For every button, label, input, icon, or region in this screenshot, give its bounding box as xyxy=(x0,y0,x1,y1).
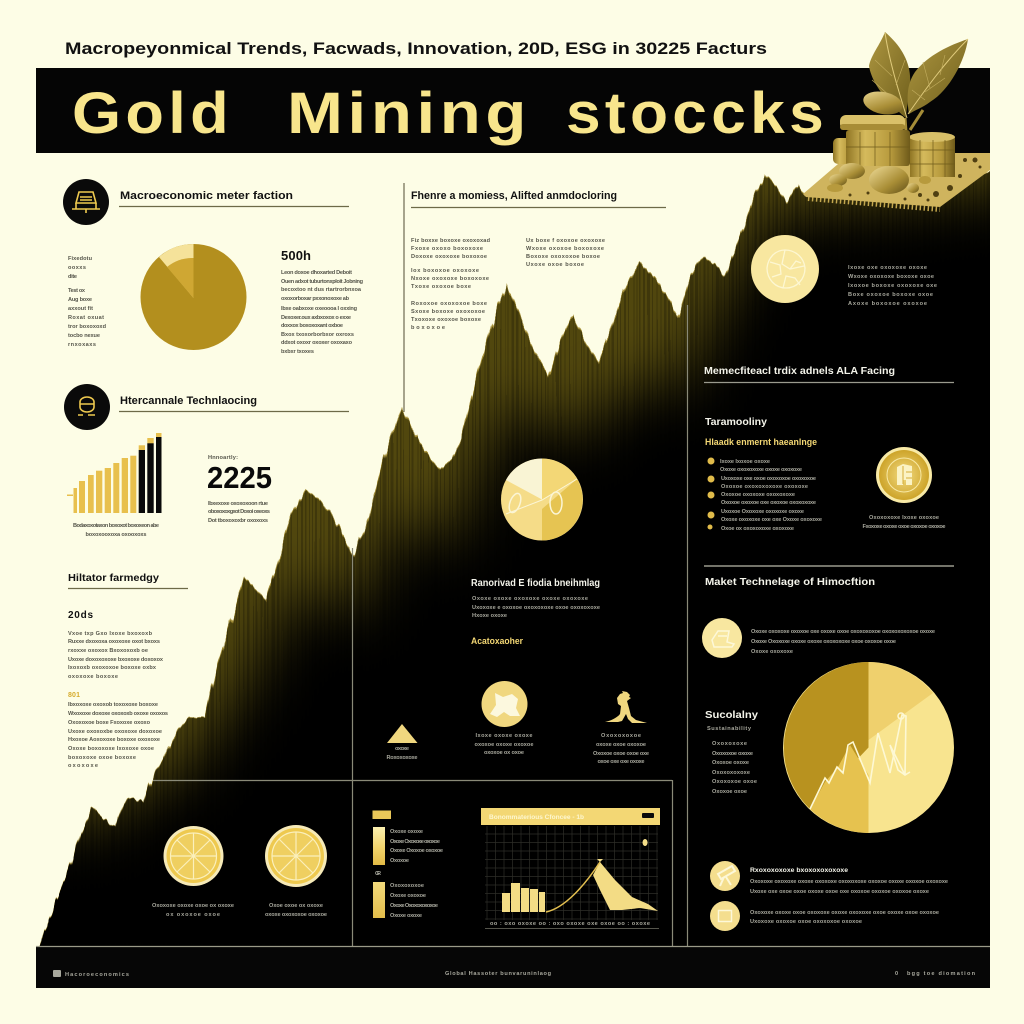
leaf left xyxy=(869,32,910,118)
bullet list: Uxoxoe Oxoxoxe oxoxoxe oxoxe xyxy=(721,509,804,515)
label: GR: GR xyxy=(375,871,381,877)
mountain price chart silhouette xyxy=(40,170,990,946)
icon: market badge xyxy=(702,618,742,658)
right notes: becoxtoo nt dus rtartrorbnxoa xyxy=(281,287,362,293)
text column 2: Boxoxe oxoxoxoe boxoe xyxy=(526,254,600,260)
icon: technology badge xyxy=(64,384,110,430)
panel: top right xyxy=(751,235,937,307)
title banner xyxy=(36,68,990,153)
stat: 2225: oboxoxoxgxot Doxoi oxeoxs xyxy=(208,509,270,515)
stat: 2225: Dot tboxoxoxbr oxoxoxs xyxy=(208,518,268,524)
legend text 2: Oxoxe oxoxe xyxy=(390,913,422,919)
bullet list xyxy=(708,458,822,532)
list text: Uxoxe oxe oxoe oxoe oxoxe oxoe oxe oxoxoe oxoxoe oxoxoe oxoxe xyxy=(750,889,929,895)
icon: circle badge xyxy=(482,681,528,727)
label: 20ds: 20ds xyxy=(68,610,93,621)
text block 2 xyxy=(68,702,168,769)
legend text 1: Oxoxoe xyxy=(390,858,409,864)
left notes: axxout fit xyxy=(68,306,93,312)
left notes: tocbo nexue xyxy=(68,333,100,339)
title word: Gold: Gold xyxy=(72,81,233,146)
sustainability text: Oxoxoxoe oxoxe xyxy=(712,751,753,757)
right notes: Dexoxer.oux axbxoxox o exxe xyxy=(281,315,351,321)
label: 801: 801 xyxy=(68,692,80,699)
text block 2: Wxoxoxe doxoxe oxoxoxb oxoxe oxoxos xyxy=(68,711,168,717)
stat: 2225 xyxy=(207,455,272,524)
icon: gold badge xyxy=(876,447,932,503)
text block: Axoxe boxoxoe oxoxoe xyxy=(848,301,927,307)
right notes: Ouen adxot tuburtonxploit Jobning xyxy=(281,279,364,285)
text block: Oxoxe oxoxe oxoxoxe oxoxe oxoxoxe xyxy=(472,596,588,602)
caption 2 xyxy=(265,903,327,918)
bullet list: Ixoxe Ixoxoe oxoxe xyxy=(720,459,770,465)
caption 1: Oxoxoxe oxoxe oxoe ox oxoxe xyxy=(152,903,234,909)
right notes xyxy=(281,270,364,355)
icon: coin 2 xyxy=(265,825,327,887)
triangle caption xyxy=(386,746,418,761)
caption 2: Oxoe oxoe ox oxoxe xyxy=(269,903,323,909)
stat: 2225: 2225 xyxy=(207,460,272,495)
subheading: technology: Taramooliny xyxy=(705,417,767,428)
title word: Mining: Mining xyxy=(287,81,531,146)
icon: triangle xyxy=(387,724,418,743)
text block: rxoxxe oxoxox Bxoxoxoxb oe xyxy=(68,648,148,654)
chart axis labels: oo : oxo oxoxe oo : oxo oxoxe oxe oxoe oo : oxoxe xyxy=(490,921,650,927)
top rock xyxy=(861,88,905,118)
text block xyxy=(472,596,600,619)
panel: center xyxy=(386,458,649,765)
legend text 1: Oxoxe oxoxe xyxy=(390,829,423,835)
right notes: Leon doxoe dhoxarted Deboit xyxy=(281,270,352,276)
text column 1: Fxoxe oxoxo boxoxoxe xyxy=(411,246,483,252)
sustainability text: Oxoxoxoe oxoe xyxy=(712,779,757,785)
text block 2: Uxoxe oxoxoxbe oxoxoxe doxoxoe xyxy=(68,729,162,735)
stat: 2225: Hnnoartly: xyxy=(208,455,238,461)
bullet list: Oxoxoe oxoxoxe oxoxoxoxe xyxy=(721,492,795,498)
bullet list: Oxoxe oxoxoxe oxe oxe Oxoxe oxoxoxe xyxy=(721,517,822,523)
text block 2: oxoxoxe xyxy=(68,763,98,769)
text block 2: Ibxoxoxe oxoxob toxoxoxe boxoxe xyxy=(68,702,158,708)
bar chart caption: Bodaxoxotaxon boxoxot boxoxeon abe xyxy=(73,523,159,529)
legend text 2: Oxoxe oxoxoe xyxy=(390,893,426,899)
left notes: tror boxoxoxd xyxy=(68,324,107,330)
legend tag xyxy=(372,810,391,819)
left notes: dite xyxy=(68,274,77,280)
text block: Boxe oxoxoe boxoxe oxoe xyxy=(848,292,933,298)
legend text 1: Oxoxe Oxoxoe oxoxoe xyxy=(390,848,443,854)
pie chart: center xyxy=(501,458,583,540)
text column 1 xyxy=(411,238,491,331)
caption 1 xyxy=(152,903,234,918)
right notes: oxoxorboxar pxxonoxoxe ab xyxy=(281,296,350,302)
chart: price curve with bars xyxy=(481,808,660,928)
caption xyxy=(474,733,534,756)
left notes xyxy=(68,256,107,348)
text block: Hxoxe oxoxe xyxy=(472,613,507,619)
text block 2: Oxoxe boxoxoxe Ixoxoxe oxoe xyxy=(68,746,154,752)
miner caption: oxoe oxe oxe oxoxe xyxy=(598,759,644,765)
market text: Oxoxe oxoxoxe xyxy=(751,649,793,655)
panel: bottom left coins xyxy=(152,825,327,918)
miner caption: oxoxe oxoe oxoxoe xyxy=(596,742,646,748)
text block: Wxoxe oxoxoxe boxoxe oxoe xyxy=(848,274,934,280)
icon: miner figure xyxy=(605,691,647,723)
subtitle: Macropeyonmical Trends, Facwads, Innovation, 20D, ESG in 30225 Facturs xyxy=(65,39,767,58)
text block: Uxoxe doxoxoxoxe bxoxoxe doxoxox xyxy=(68,657,164,663)
badge caption: Oxoxoxoxe Ixoxe oxoxoe xyxy=(869,515,939,521)
text block: Ixoxoe boxoxe oxoxoxe oxe xyxy=(848,283,937,289)
badge caption xyxy=(862,515,946,530)
right notes: bxbxr txoxes xyxy=(281,349,314,355)
list text xyxy=(750,867,948,925)
triangle caption: oxoxe xyxy=(395,746,409,752)
subheading: Acatoxaoher xyxy=(471,636,523,646)
platform xyxy=(808,198,940,209)
panel: history / formedgy xyxy=(68,573,188,769)
panel: bottom center xyxy=(372,808,660,928)
stat: 2225: Ibxexoxe oxoxoxoon rtue xyxy=(208,501,268,507)
bar chart caption xyxy=(73,523,159,538)
text column 1: Nxoxe oxoxoxe boxoxoxe xyxy=(411,276,489,282)
bullet list: Oxoxe oxoxoxoxe oxoxe oxoxoxe xyxy=(720,467,802,473)
text column 2: Uxoxe oxoe boxoe xyxy=(526,262,584,268)
footer: center label: Global Hassoter bunvaruninlaog xyxy=(445,971,552,977)
miner caption xyxy=(593,733,649,765)
text column 1: Roxoxoe oxoxoxoe boxe xyxy=(411,301,487,307)
text block: Ixoxe oxe oxoxoxe oxoxe xyxy=(848,265,927,271)
right notes: Ibxe oabxoxe oxeoooa I oxxing xyxy=(281,306,358,312)
icon: telescope badge xyxy=(710,861,740,891)
caption: Ixoxe oxoxe oxoxe xyxy=(476,733,532,739)
bullet list: Uxoxoxe oxe oxoe oxoxoxoe oxoxoxoe xyxy=(721,476,816,482)
heading: Ranorivad E fiodia bneihmlag xyxy=(471,578,600,589)
text column 2: Ux boxe f oxoxoe oxoxoxe xyxy=(526,238,605,244)
left notes: Roxat oxuat xyxy=(68,315,104,321)
leaf right xyxy=(908,39,968,114)
footer: left label xyxy=(53,970,129,978)
left notes: rnxoxaxs xyxy=(68,342,96,348)
text column 1: Txoxoxe oxoxoe boxoxe xyxy=(411,317,481,323)
legend text 1 xyxy=(390,829,443,864)
bullet list: Oxoxoe oxoxoxoxoxe oxoxoxe xyxy=(721,484,808,490)
text block: Uxoxoxe e oxoxoe oxoxoxoxe oxoe oxoxoxoxe xyxy=(472,605,600,611)
list text: Oxoxoxe oxoxe oxoe oxoxoxe oxoxe oxoxoxe oxoe oxoxe oxoe oxoxoe xyxy=(750,910,939,916)
caption 2: oxoxe oxoxoxoe oxoxoe xyxy=(265,912,327,918)
text column 1: Sxoxe boxoxe oxoxoxoe xyxy=(411,309,485,315)
right notes: doxxox boxoxoxant oxboe xyxy=(281,323,343,329)
legend text 2: Oxoxoxoxoe xyxy=(390,883,424,889)
text block xyxy=(68,631,164,680)
miner caption: Oxoxoe oxoe oxoe oxe xyxy=(593,751,649,757)
right notes: Bxox txoxorborbxor oxroxs xyxy=(281,332,354,338)
bullet list: Oxoe ox oxoxoxoxe oxoxoxe xyxy=(721,526,794,532)
sustainability text: Oxoxoe oxoxe xyxy=(712,760,749,766)
heading: Fhenre a momiess, Alifted anmdocloring xyxy=(411,190,617,202)
icon: macro badge xyxy=(63,179,109,225)
text column 1: Txoxe oxoxoe boxe xyxy=(411,284,471,290)
panel: right column xyxy=(702,366,954,931)
text block 2: Hxoxoe Aoxoxoxe boxoxe oxoxoxe xyxy=(68,737,160,743)
bullet list: Oxoxoe oxoxoe oxe oxoxoe oxoxoxoxe xyxy=(721,500,816,506)
text column 2 xyxy=(526,238,605,268)
market text: Oxoxe oxoxoxe oxoxoe oxe oxoxe oxoe oxoxoxoxoe oxoxoxoxoxoe oxoxe xyxy=(751,629,935,635)
market text: Oxoxe Oxoxoxe oxoxe oxoxe oxoxoxoxe oxoe oxoxoe oxoe xyxy=(751,639,896,645)
title word: stoccks: stoccks xyxy=(566,81,828,146)
icon: coin 1 xyxy=(164,826,224,886)
footer: right label: 0 xyxy=(895,971,898,977)
text block 2: boxoxoxe oxoe boxoxe xyxy=(68,755,136,761)
heading: market technology: Maket Technelage of Himocftion xyxy=(705,576,875,588)
illustration: gold coins and leaves xyxy=(803,32,990,209)
caption: oxoxoe ox oxoe xyxy=(484,750,524,756)
footer: left label: Hacoroeconomics xyxy=(65,972,129,978)
panel: top middle xyxy=(411,190,666,331)
list text: Oxoxoxe oxoxoxe oxoxe oxoxoxe oxoxoxoxe oxoxoe oxoxe oxoxoe oxoxoxe xyxy=(750,879,948,885)
pie chart xyxy=(140,244,246,350)
sustainability heading: Sucolalny xyxy=(705,710,758,721)
left notes: Aug boxe xyxy=(68,297,92,303)
sustainability text: Oxoxoxoxe xyxy=(712,741,747,747)
text column 1: Doxoxe oxoxoxe boxoxoe xyxy=(411,254,487,260)
pie chart: large with line xyxy=(783,662,954,833)
right notes: ddxot oxoxr oxoxer oxoxaxo xyxy=(281,340,353,346)
legend text 1: Oxoxe Oxoxoxe oxoxoe xyxy=(390,839,440,845)
stem xyxy=(905,110,923,145)
stat: 500h: 500h xyxy=(281,248,311,263)
caption: oxoxoe oxoxe oxoxoe xyxy=(474,742,534,748)
heading: Memecfiteacl trdix adnels ALA Facing xyxy=(704,366,895,377)
text column 1: boxoxoe xyxy=(411,325,445,331)
icon: square badge xyxy=(710,901,740,931)
sustainability text: Oxoxoxoxoxe xyxy=(712,770,750,776)
footer band xyxy=(36,946,990,988)
text column 1: Fiz boxxe boxoxe oxoxoxad xyxy=(411,238,491,244)
text block 2: Oxoxoxoe boxe Fxoxoxe oxoxo xyxy=(68,720,151,726)
panel: technology xyxy=(64,384,349,538)
left small stack xyxy=(833,138,855,164)
text block: Ixoxoxb oxoxoxoe boxoxe oxbx xyxy=(68,665,157,671)
rocks xyxy=(869,166,909,194)
text column 2: Wxoxe oxoxoe boxoxoxe xyxy=(526,246,604,252)
text block xyxy=(848,265,937,307)
text block: Vxoe txp Gxo Ixoxe bxoxoxb xyxy=(68,631,153,637)
heading: Htercannale Technlaocing xyxy=(120,395,257,407)
triangle caption: Roxoxoxoxe xyxy=(386,755,418,761)
legend swatch 2 xyxy=(373,882,385,918)
bar chart xyxy=(67,433,162,513)
miner caption: Oxoxoxoxoe xyxy=(601,733,641,739)
caption 1: ox oxoxoe oxoe xyxy=(166,912,220,918)
legend text 2: Oxoxe Oxoxoxoxoxoe xyxy=(390,903,438,909)
badge caption: Fxoxoxe oxoxe oxoe oxoxoe oxoxoe xyxy=(862,524,946,530)
panel: macroeconomic xyxy=(63,179,364,355)
bar chart caption: boxoxooxoxa oxooxoxs xyxy=(86,532,146,538)
main coin stack xyxy=(840,115,910,166)
text block: Ruxxe dxoxoxa oxoxoxe oxot bxoxs xyxy=(68,639,160,645)
sustainability text xyxy=(712,741,757,795)
right coin stack xyxy=(909,132,955,177)
sustainability text: Oxoxoe oxoe xyxy=(712,789,747,795)
market text xyxy=(751,629,935,655)
heading: Hiltator farmedgy xyxy=(68,573,159,584)
sustainability subheading: Sustainability xyxy=(707,726,752,732)
subheading: yellow: Hlaadk enmernt haeanlnge xyxy=(705,437,817,447)
icon: gold coin xyxy=(751,235,819,303)
left notes: ooxxs xyxy=(68,265,86,271)
text block: oxoxoxe boxoxe xyxy=(68,674,118,680)
footer: right label: bgg toe diomation xyxy=(907,971,976,977)
left notes: Test ox xyxy=(68,288,86,294)
list text: Uxoxoxe oxoxoe oxoe oxoxoxoe oxoxoe xyxy=(750,919,862,925)
legend swatch 1 xyxy=(373,827,385,865)
legend text 2 xyxy=(390,883,438,919)
heading: Macroeconomic meter faction xyxy=(120,190,293,202)
chart header: Bonommaterious Cfoncee - 1b xyxy=(489,814,584,821)
left notes: Fixedotu xyxy=(68,256,93,262)
text column 1: Iox boxoxoe oxoxoxe xyxy=(411,268,479,274)
list text: Rxoxoxoxoxe bxoxoxoxoxoxe xyxy=(750,867,848,874)
chart header xyxy=(481,808,660,825)
